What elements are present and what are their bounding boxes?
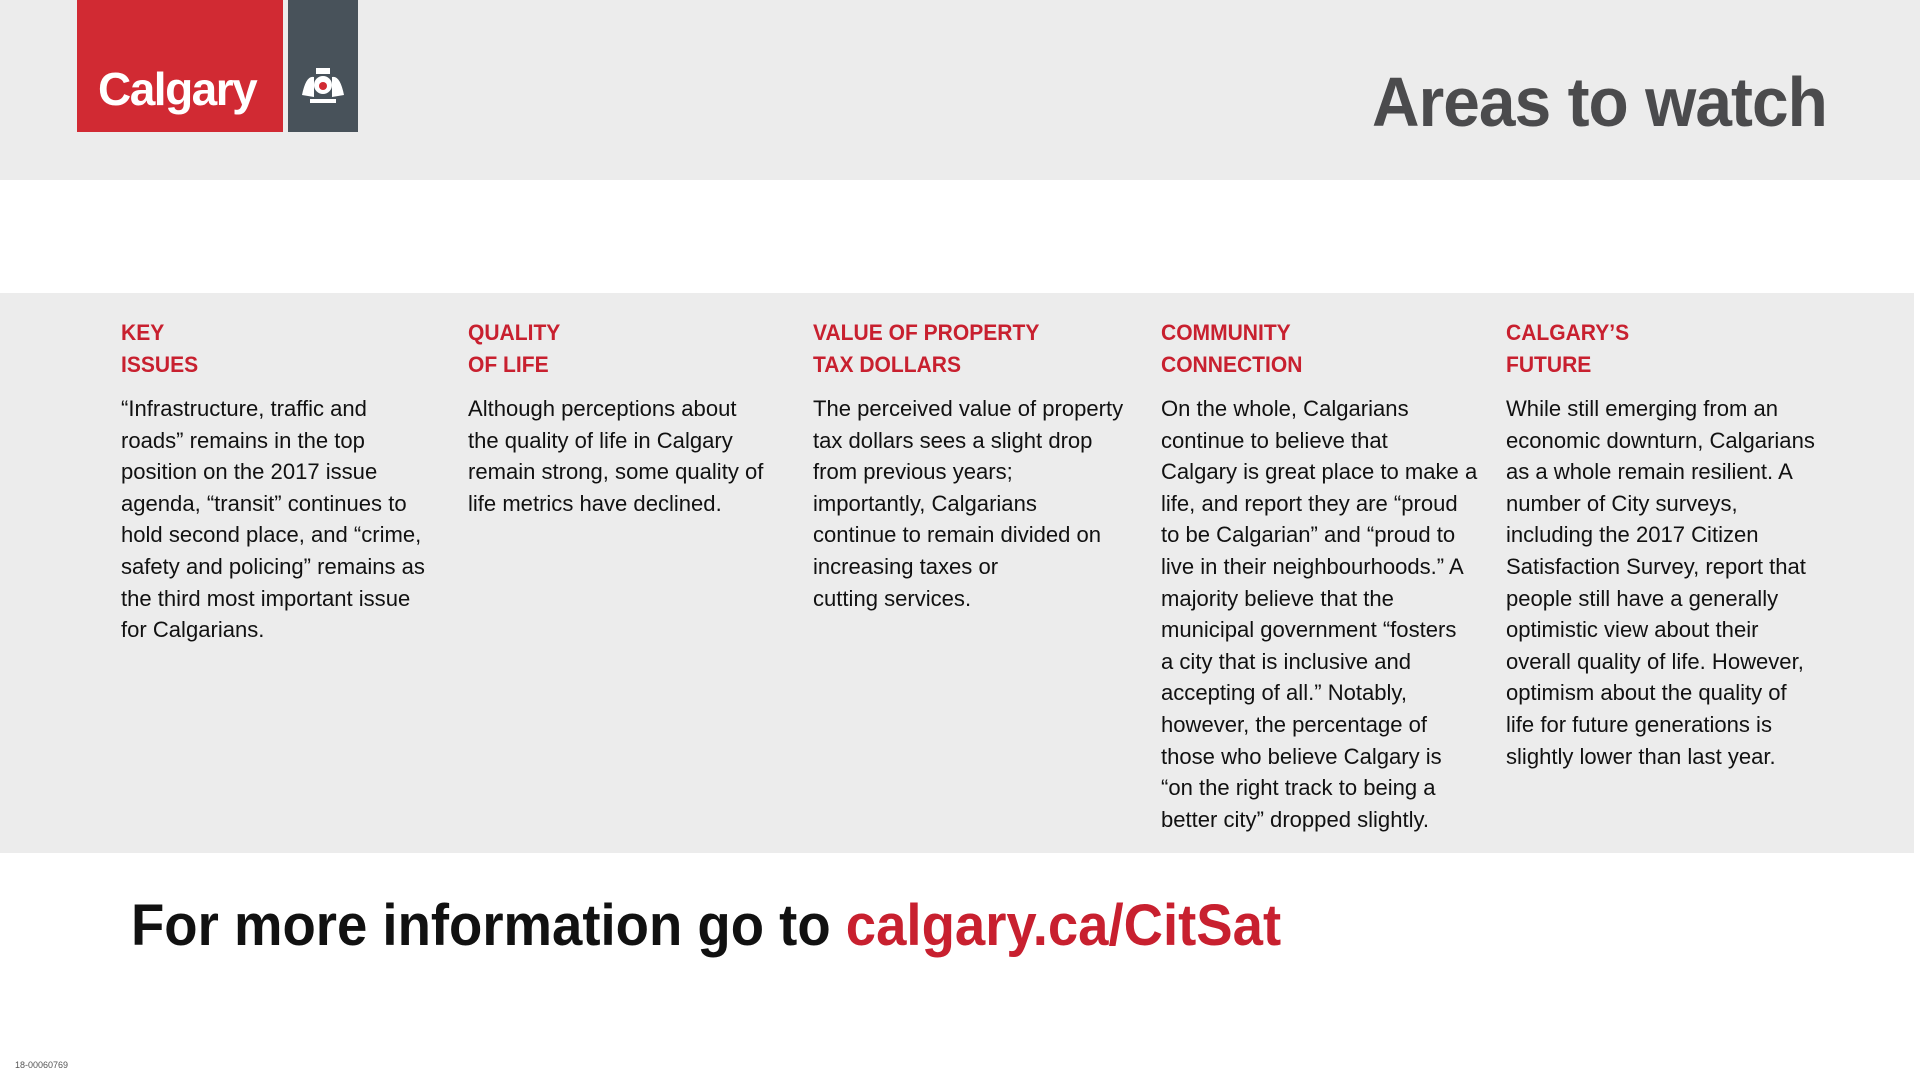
column: community connection: CONNECTION <box>1161 352 1302 377</box>
column: calgary's future: slightly lower than last year. <box>1506 744 1776 769</box>
column: quality of life <box>468 320 764 516</box>
column: quality of life: life metrics have declined. <box>468 491 722 516</box>
column: community connection: live in their neighbourhoods.” A <box>1161 554 1464 579</box>
column: calgary's future: overall quality of life. However, <box>1506 649 1804 674</box>
column: key issues: ISSUES <box>121 352 198 377</box>
column: property tax: VALUE OF PROPERTY <box>813 320 1039 345</box>
logo: coat of arms <box>288 0 358 132</box>
column: key issues: safety and policing” remains as <box>121 554 425 579</box>
column: community connection: majority believe that the <box>1161 586 1394 611</box>
column: community connection: a city that is inclusive and <box>1161 649 1411 674</box>
column: quality of life: OF LIFE <box>468 352 549 377</box>
column: property tax: The perceived value of property <box>813 396 1123 421</box>
column: key issues: KEY <box>121 320 164 345</box>
column: property tax: from previous years; <box>813 459 1013 484</box>
column: property tax <box>813 320 1124 611</box>
column: calgary's future: number of City surveys, <box>1506 491 1738 516</box>
column: key issues <box>121 320 425 642</box>
column: key issues: position on the 2017 issue <box>121 459 377 484</box>
column: calgary's future: optimism about the quality of <box>1506 680 1787 705</box>
document code: 18-00060769 <box>15 1060 68 1070</box>
column: quality of life: the quality of life in Calgary <box>468 428 733 453</box>
column: calgary's future: CALGARY’S <box>1506 320 1629 345</box>
column: calgary's future: FUTURE <box>1506 352 1591 377</box>
column: calgary's future: economic downturn, Calgarians <box>1506 428 1815 453</box>
title: Areas to watch <box>1372 63 1827 141</box>
logo: Calgary <box>77 0 283 132</box>
column: community connection: life, and report they are “proud <box>1161 491 1458 516</box>
column: calgary's future: people still have a generally <box>1506 586 1778 611</box>
logo: Calgary: Calgary <box>98 63 256 115</box>
column: community connection: accepting of all.” Notably, <box>1161 680 1407 705</box>
column: key issues: the third most important issue <box>121 586 410 611</box>
column: community connection: better city” dropped slightly. <box>1161 807 1429 832</box>
panel: areas <box>0 293 1914 853</box>
column: quality of life: QUALITY <box>468 320 560 345</box>
column: community connection: municipal government “fosters <box>1161 617 1456 642</box>
column: property tax: tax dollars sees a slight drop <box>813 428 1092 453</box>
column: property tax: importantly, Calgarians <box>813 491 1037 516</box>
column: calgary's future: While still emerging from an <box>1506 396 1778 421</box>
column: calgary's future <box>1506 320 1815 769</box>
column: calgary's future: optimistic view about their <box>1506 617 1758 642</box>
header band <box>0 0 1920 180</box>
column: community connection: On the whole, Calgarians <box>1161 396 1409 421</box>
column: community connection: COMMUNITY <box>1161 320 1291 345</box>
column: key issues: roads” remains in the top <box>121 428 365 453</box>
column: calgary's future: as a whole remain resilient. A <box>1506 459 1793 484</box>
column: key issues: “Infrastructure, traffic and <box>121 396 367 421</box>
column: calgary's future: including the 2017 Citizen <box>1506 522 1759 547</box>
column: key issues: agenda, “transit” continues to <box>121 491 407 516</box>
column: key issues: for Calgarians. <box>121 617 264 642</box>
column: community connection: to be Calgarian” and “proud to <box>1161 522 1455 547</box>
column: community connection: Calgary is great place to make a <box>1161 459 1477 484</box>
column: community connection: “on the right track to being a <box>1161 775 1436 800</box>
column: property tax: TAX DOLLARS <box>813 352 961 377</box>
column: community connection: continue to believe that <box>1161 428 1388 453</box>
footer call to action: For more information go to calgary.ca/CitSat <box>131 893 1281 958</box>
column: community connection: however, the percentage of <box>1161 712 1427 737</box>
column: community connection <box>1161 320 1478 832</box>
column: calgary's future: Satisfaction Survey, report that <box>1506 554 1806 579</box>
column: calgary's future: life for future generations is <box>1506 712 1772 737</box>
column: property tax: cutting services. <box>813 586 971 611</box>
column: quality of life: Although perceptions about <box>468 396 736 421</box>
column: property tax: continue to remain divided on <box>813 522 1101 547</box>
column: property tax: increasing taxes or <box>813 554 998 579</box>
column: community connection: those who believe Calgary is <box>1161 744 1442 769</box>
column: quality of life: remain strong, some quality of <box>468 459 763 484</box>
column: key issues: hold second place, and “crime, <box>121 522 421 547</box>
